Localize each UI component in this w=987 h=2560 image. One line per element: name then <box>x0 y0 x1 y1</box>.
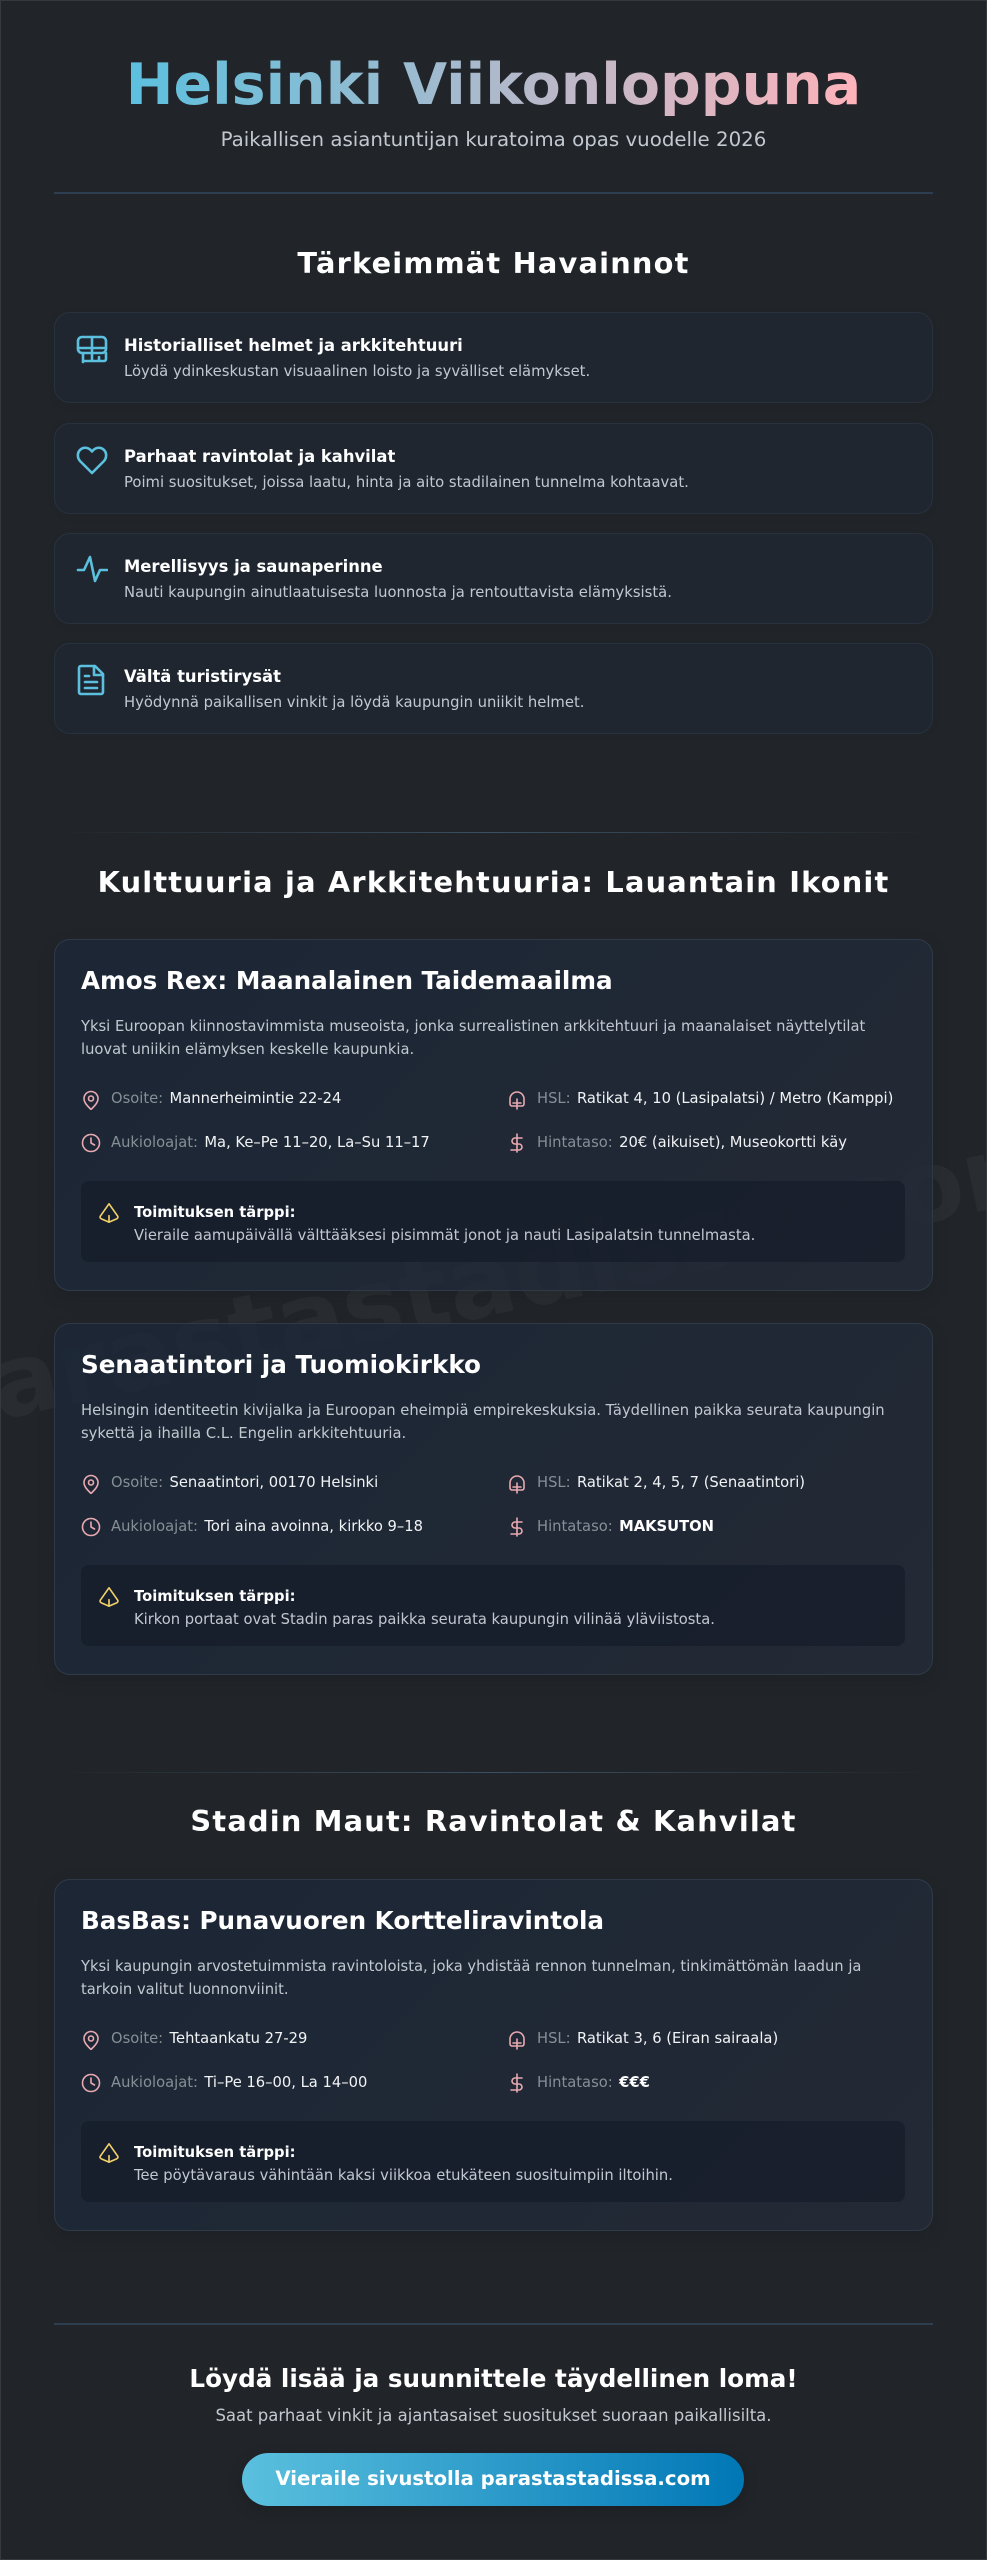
finding title: Merellisyys ja saunaperinne <box>124 557 383 576</box>
address: Osoite: Senaatintori, 00170 Helsinki <box>111 1474 378 1491</box>
finding title: Vältä turistirysät <box>124 667 281 686</box>
icon: clock <box>82 1134 100 1152</box>
icon: clock <box>82 1518 100 1536</box>
card description: Yksi Euroopan kiinnostavimmista museoista, jonka surrealistinen arkkitehtuuri ja maanalaiset näyttelytilat luovat uniikin elämyksen keskelle kaupunkia. <box>81 1018 865 1058</box>
finding text: Poimi suositukset, joissa laatu, hinta ja aito stadilainen tunnelma kohtaavat. <box>124 474 689 491</box>
transit info: HSL: Ratikat 4, 10 (Lasipalatsi) / Metro (Kamppi) <box>537 1090 893 1107</box>
opening hours: Aukioloajat: Ti–Pe 16–00, La 14–00 <box>111 2074 367 2091</box>
card description: Helsingin identiteetin kivijalka ja Euroopan eheimpiä empirekeskuksia. Täydellinen paikka seurata kaupungin sykettä ja ihailla C.L. Engelin arkkitehtuuria. <box>81 1402 885 1442</box>
editor tip <box>81 1565 905 1646</box>
icon: clock <box>82 2074 100 2092</box>
panel: key finding 3 <box>54 533 933 624</box>
finding text: Löydä ydinkeskustan visuaalinen loisto ja syvälliset elämykset. <box>124 363 590 380</box>
card description: Yksi kaupungin arvostetuimmista ravintoloista, joka yhdistää rennon tunnelman, tinkimättömän laadun ja tarkoin valitut luonnonviinit. <box>81 1958 861 1998</box>
tip text: Tee pöytävaraus vähintään kaksi viikkoa etukäteen suosituimpiin iltoihin. <box>134 2167 673 2184</box>
icon: pin <box>83 1090 99 1110</box>
icon: transit <box>509 1091 525 1110</box>
opening hours: Aukioloajat: Tori aina avoinna, kirkko 9–18 <box>111 1518 423 1535</box>
panel: Amos Rex <box>54 939 933 1291</box>
icon: document <box>78 664 104 696</box>
icon: tip <box>99 1203 119 1223</box>
heading: food section: Stadin Maut: Ravintolat & Kahvilat <box>190 1804 797 1838</box>
opening hours: Aukioloajat: Ma, Ke–Pe 11–20, La–Su 11–17 <box>111 1134 430 1151</box>
call-to-action button <box>242 2453 744 2506</box>
address: Osoite: Tehtaankatu 27-29 <box>111 2030 307 2047</box>
card title: Amos Rex: Maanalainen Taidemaailma <box>81 966 613 995</box>
icon: dollar <box>510 2073 523 2093</box>
icon: pin <box>83 1474 99 1494</box>
panel: key finding 2 <box>54 423 933 514</box>
tip text: Kirkon portaat ovat Stadin paras paikka seurata kaupungin vilinää yläviistosta. <box>134 1611 715 1628</box>
heading: culture section: Kulttuuria ja Arkkitehtuuria: Lauantain Ikonit <box>98 865 889 899</box>
icon: building grid <box>76 336 108 364</box>
icon: pin <box>83 2030 99 2050</box>
finding text: Hyödynnä paikallisen vinkit ja löydä kaupungin uniikit helmet. <box>124 694 584 711</box>
icon: tip <box>99 2143 119 2163</box>
panel: BasBas <box>54 1879 933 2231</box>
icon: pulse <box>76 556 108 582</box>
icon: heart <box>76 446 108 474</box>
card title: Senaatintori ja Tuomiokirkko <box>81 1350 481 1379</box>
tip text: Vieraile aamupäivällä välttääksesi pisimmät jonot ja nauti Lasipalatsin tunnelmasta. <box>134 1227 755 1244</box>
panel: key finding 4 <box>54 643 933 734</box>
price: Hintataso: MAKSUTON <box>537 1518 714 1535</box>
icon: dollar <box>510 1133 523 1153</box>
icon: transit <box>509 1475 525 1494</box>
tip title: Toimituksen tärppi: <box>134 1204 296 1221</box>
transit info: HSL: Ratikat 3, 6 (Eiran sairaala) <box>537 2030 778 2047</box>
icon: tip <box>99 1587 119 1607</box>
address: Osoite: Mannerheimintie 22-24 <box>111 1090 341 1107</box>
panel: Senaatintori <box>54 1323 933 1675</box>
card title: BasBas: Punavuoren Kortteliravintola <box>81 1906 604 1935</box>
footer text: Saat parhaat vinkit ja ajantasaiset suositukset suoraan paikallisilta. <box>215 2406 772 2425</box>
footer heading: Löydä lisää ja suunnittele täydellinen loma! <box>189 2364 798 2393</box>
tip title: Toimituksen tärppi: <box>134 2144 296 2161</box>
price: Hintataso: 20€ (aikuiset), Museokortti käy <box>537 1134 847 1151</box>
icon: transit <box>509 2031 525 2050</box>
finding title: Historialliset helmet ja arkkitehtuuri <box>124 336 463 355</box>
icon: dollar <box>510 1517 523 1537</box>
tip title: Toimituksen tärppi: <box>134 1588 296 1605</box>
editor tip <box>81 1181 905 1262</box>
price: Hintataso: €€€ <box>537 2074 650 2091</box>
transit info: HSL: Ratikat 2, 4, 5, 7 (Senaatintori) <box>537 1474 805 1491</box>
heading: key findings: Tärkeimmät Havainnot <box>297 246 690 280</box>
panel: key finding 1 <box>54 312 933 403</box>
finding text: Nauti kaupungin ainutlaatuisesta luonnosta ja rentouttavista elämyksistä. <box>124 584 672 601</box>
call-to-action button: Vieraile sivustolla parastastadissa.com <box>275 2467 711 2490</box>
finding title: Parhaat ravintolat ja kahvilat <box>124 447 395 466</box>
title: Helsinki Viikonloppuna <box>126 52 861 118</box>
editor tip <box>81 2121 905 2202</box>
subtitle: Paikallisen asiantuntijan kuratoima opas vuodelle 2026 <box>221 128 766 151</box>
